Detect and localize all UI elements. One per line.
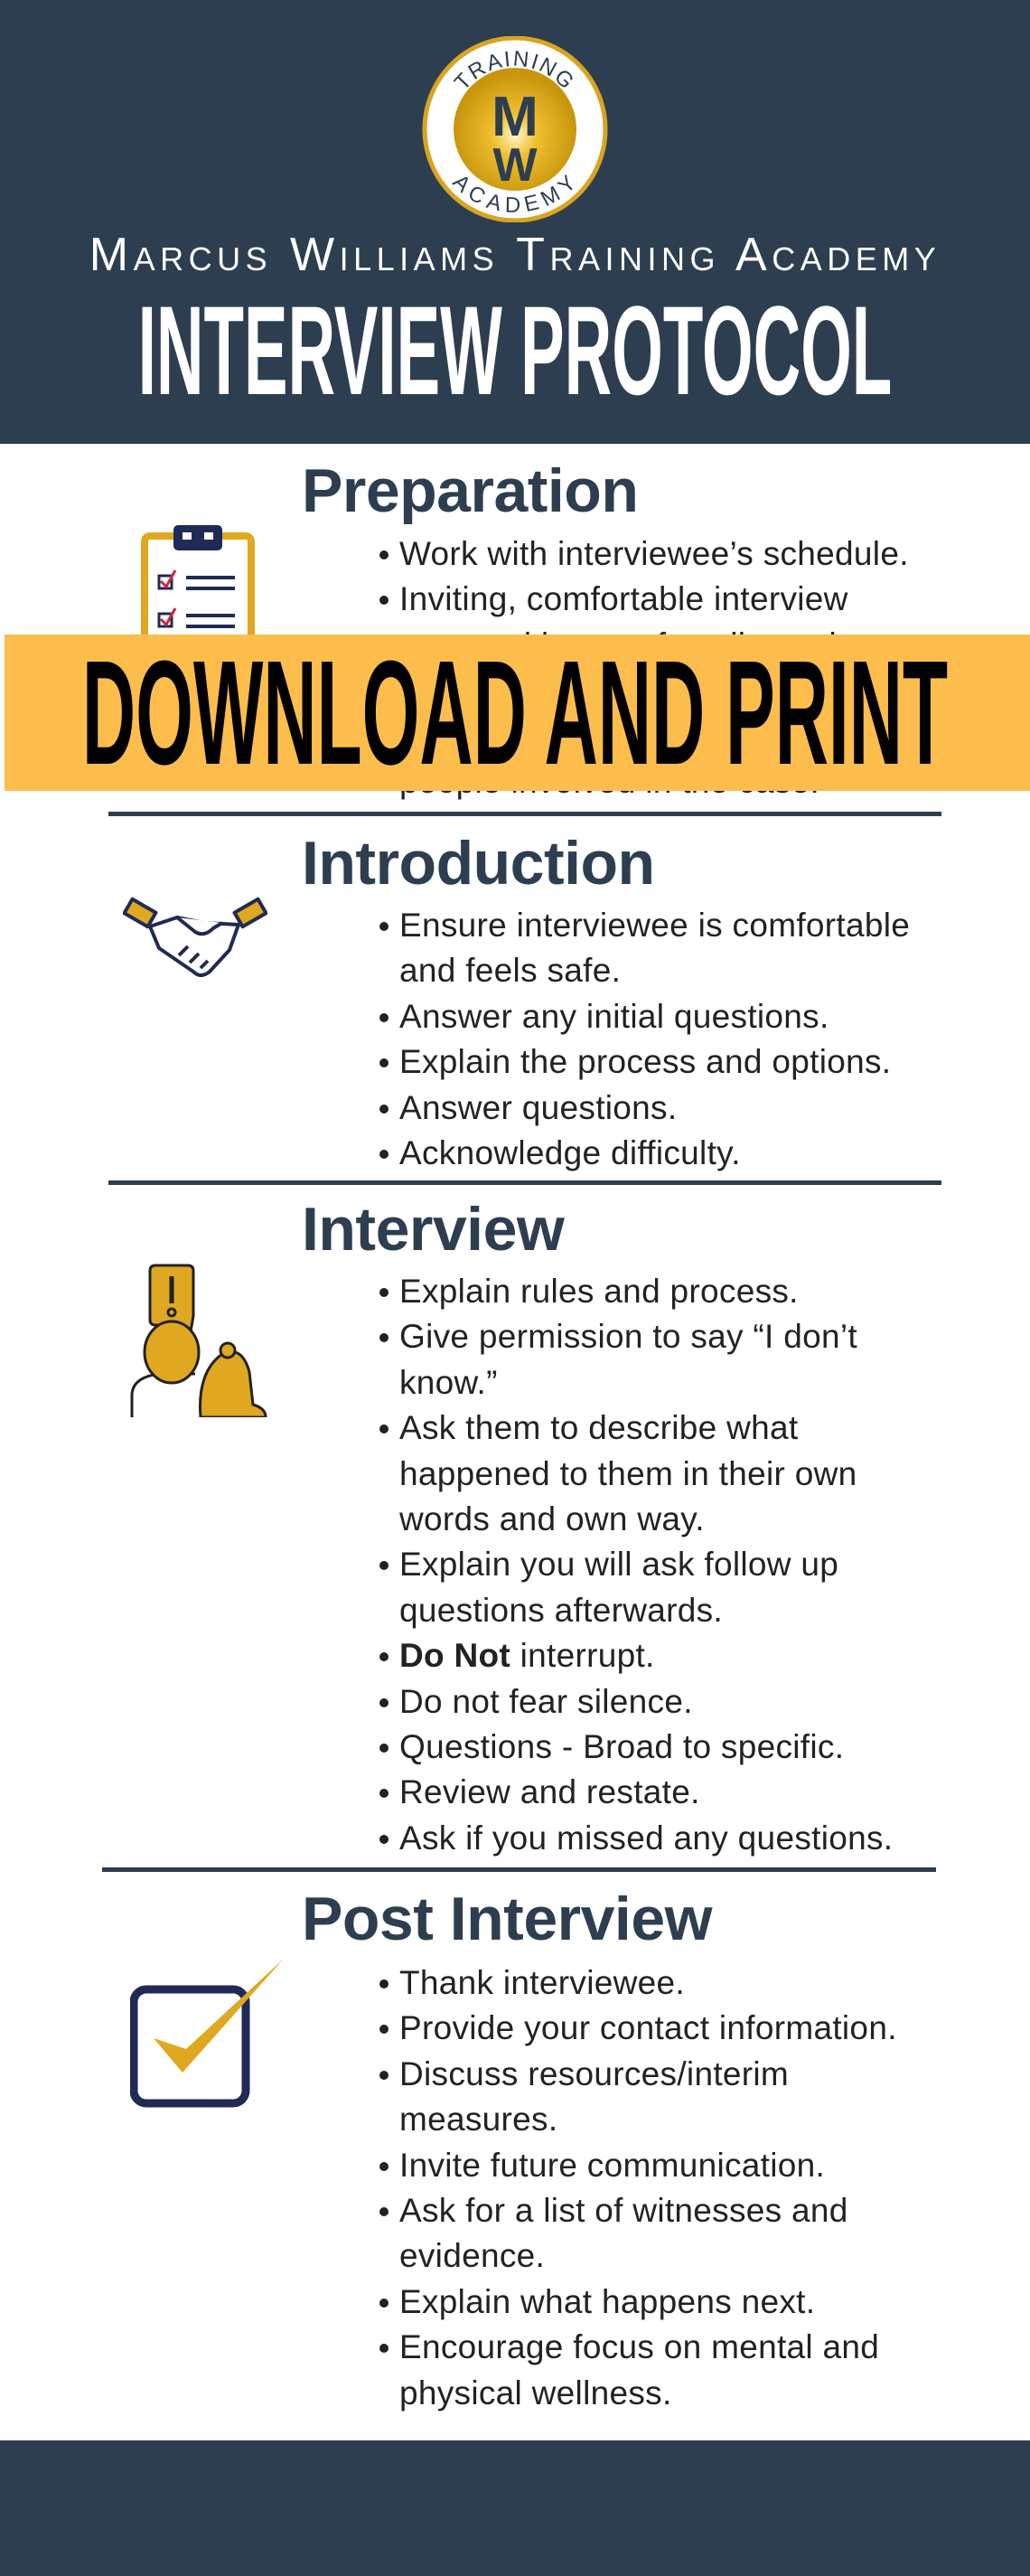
list: post interview: Explain what happens next. xyxy=(399,2283,815,2320)
list: post interview: Provide your contact information. xyxy=(399,2009,897,2046)
title: INTERVIEW PROTOCOL xyxy=(138,279,892,421)
list: interview: Give permission to say “I don’t xyxy=(399,1318,857,1355)
logo: ACADEMY xyxy=(452,174,573,212)
list: introduction: Answer questions. xyxy=(399,1089,677,1126)
list: introduction: Answer any initial questions. xyxy=(399,998,829,1035)
list: post interview: Thank interviewee. xyxy=(399,1964,685,2001)
list: post interview: evidence. xyxy=(399,2237,545,2274)
list: introduction xyxy=(379,907,910,1171)
list: interview: know.” xyxy=(399,1364,498,1401)
list: interview xyxy=(379,1273,893,1857)
heading: introduction: Introduction xyxy=(302,829,655,898)
icon: checkbox xyxy=(130,1959,284,2108)
list: interview: Do Not interrupt. xyxy=(399,1637,655,1674)
list: preparation: people involved in the case. xyxy=(399,763,819,800)
list: interview: Explain you will ask follow up xyxy=(399,1546,838,1583)
header band xyxy=(0,0,1030,444)
list: post interview: Invite future communication. xyxy=(399,2147,825,2184)
list: preparation: Work with interviewee’s schedule. xyxy=(399,535,909,572)
list: interview: Ask them to describe what xyxy=(399,1409,798,1446)
logo: TRAINING xyxy=(454,51,573,87)
list: interview: Review and restate. xyxy=(399,1773,700,1810)
list: introduction: Explain the process and options. xyxy=(399,1043,891,1080)
heading: interview: Interview xyxy=(302,1195,564,1264)
list: introduction: Ensure interviewee is comfortable xyxy=(399,907,910,944)
list: post interview: Encourage focus on mental and xyxy=(399,2328,879,2365)
list: preparation: space with no or few distractions. xyxy=(399,626,901,663)
logo xyxy=(423,36,607,222)
list: post interview: measures. xyxy=(399,2101,557,2138)
list: post interview: physical wellness. xyxy=(399,2374,672,2411)
section: preparation xyxy=(141,456,909,800)
list: interview: Explain rules and process. xyxy=(399,1273,799,1310)
icon: handshake xyxy=(123,897,267,978)
list: interview: happened to them in their own xyxy=(399,1455,857,1492)
heading: preparation: Preparation xyxy=(302,456,638,525)
list: interview: questions afterwards. xyxy=(399,1592,723,1629)
icon: people talking xyxy=(130,1264,267,1417)
list: interview: Ask if you missed any questions. xyxy=(399,1819,893,1857)
list: introduction: Acknowledge difficulty. xyxy=(399,1134,741,1171)
list: preparation xyxy=(379,535,909,800)
list: interview: Questions - Broad to specific. xyxy=(399,1728,844,1765)
heading: post interview: Post Interview xyxy=(302,1885,712,1953)
academy name: Marcus Williams Training Academy xyxy=(89,229,941,281)
list: introduction: and feels safe. xyxy=(399,952,621,989)
list: interview: words and own way. xyxy=(399,1500,705,1537)
list: preparation: Inviting, comfortable interview xyxy=(399,580,848,617)
logo: W xyxy=(492,139,538,192)
logo: M xyxy=(492,86,538,148)
icon: clipboard xyxy=(141,525,255,635)
list: interview: Do not fear silence. xyxy=(399,1683,693,1720)
list: post interview: Discuss resources/interim xyxy=(399,2055,789,2092)
list: post interview: Ask for a list of witnesses and xyxy=(399,2192,848,2229)
list: preparation: case and the xyxy=(399,718,594,755)
list: post interview xyxy=(379,1964,897,2411)
footer band xyxy=(0,2440,1030,2576)
list: preparation: Gather information about the xyxy=(399,672,832,709)
